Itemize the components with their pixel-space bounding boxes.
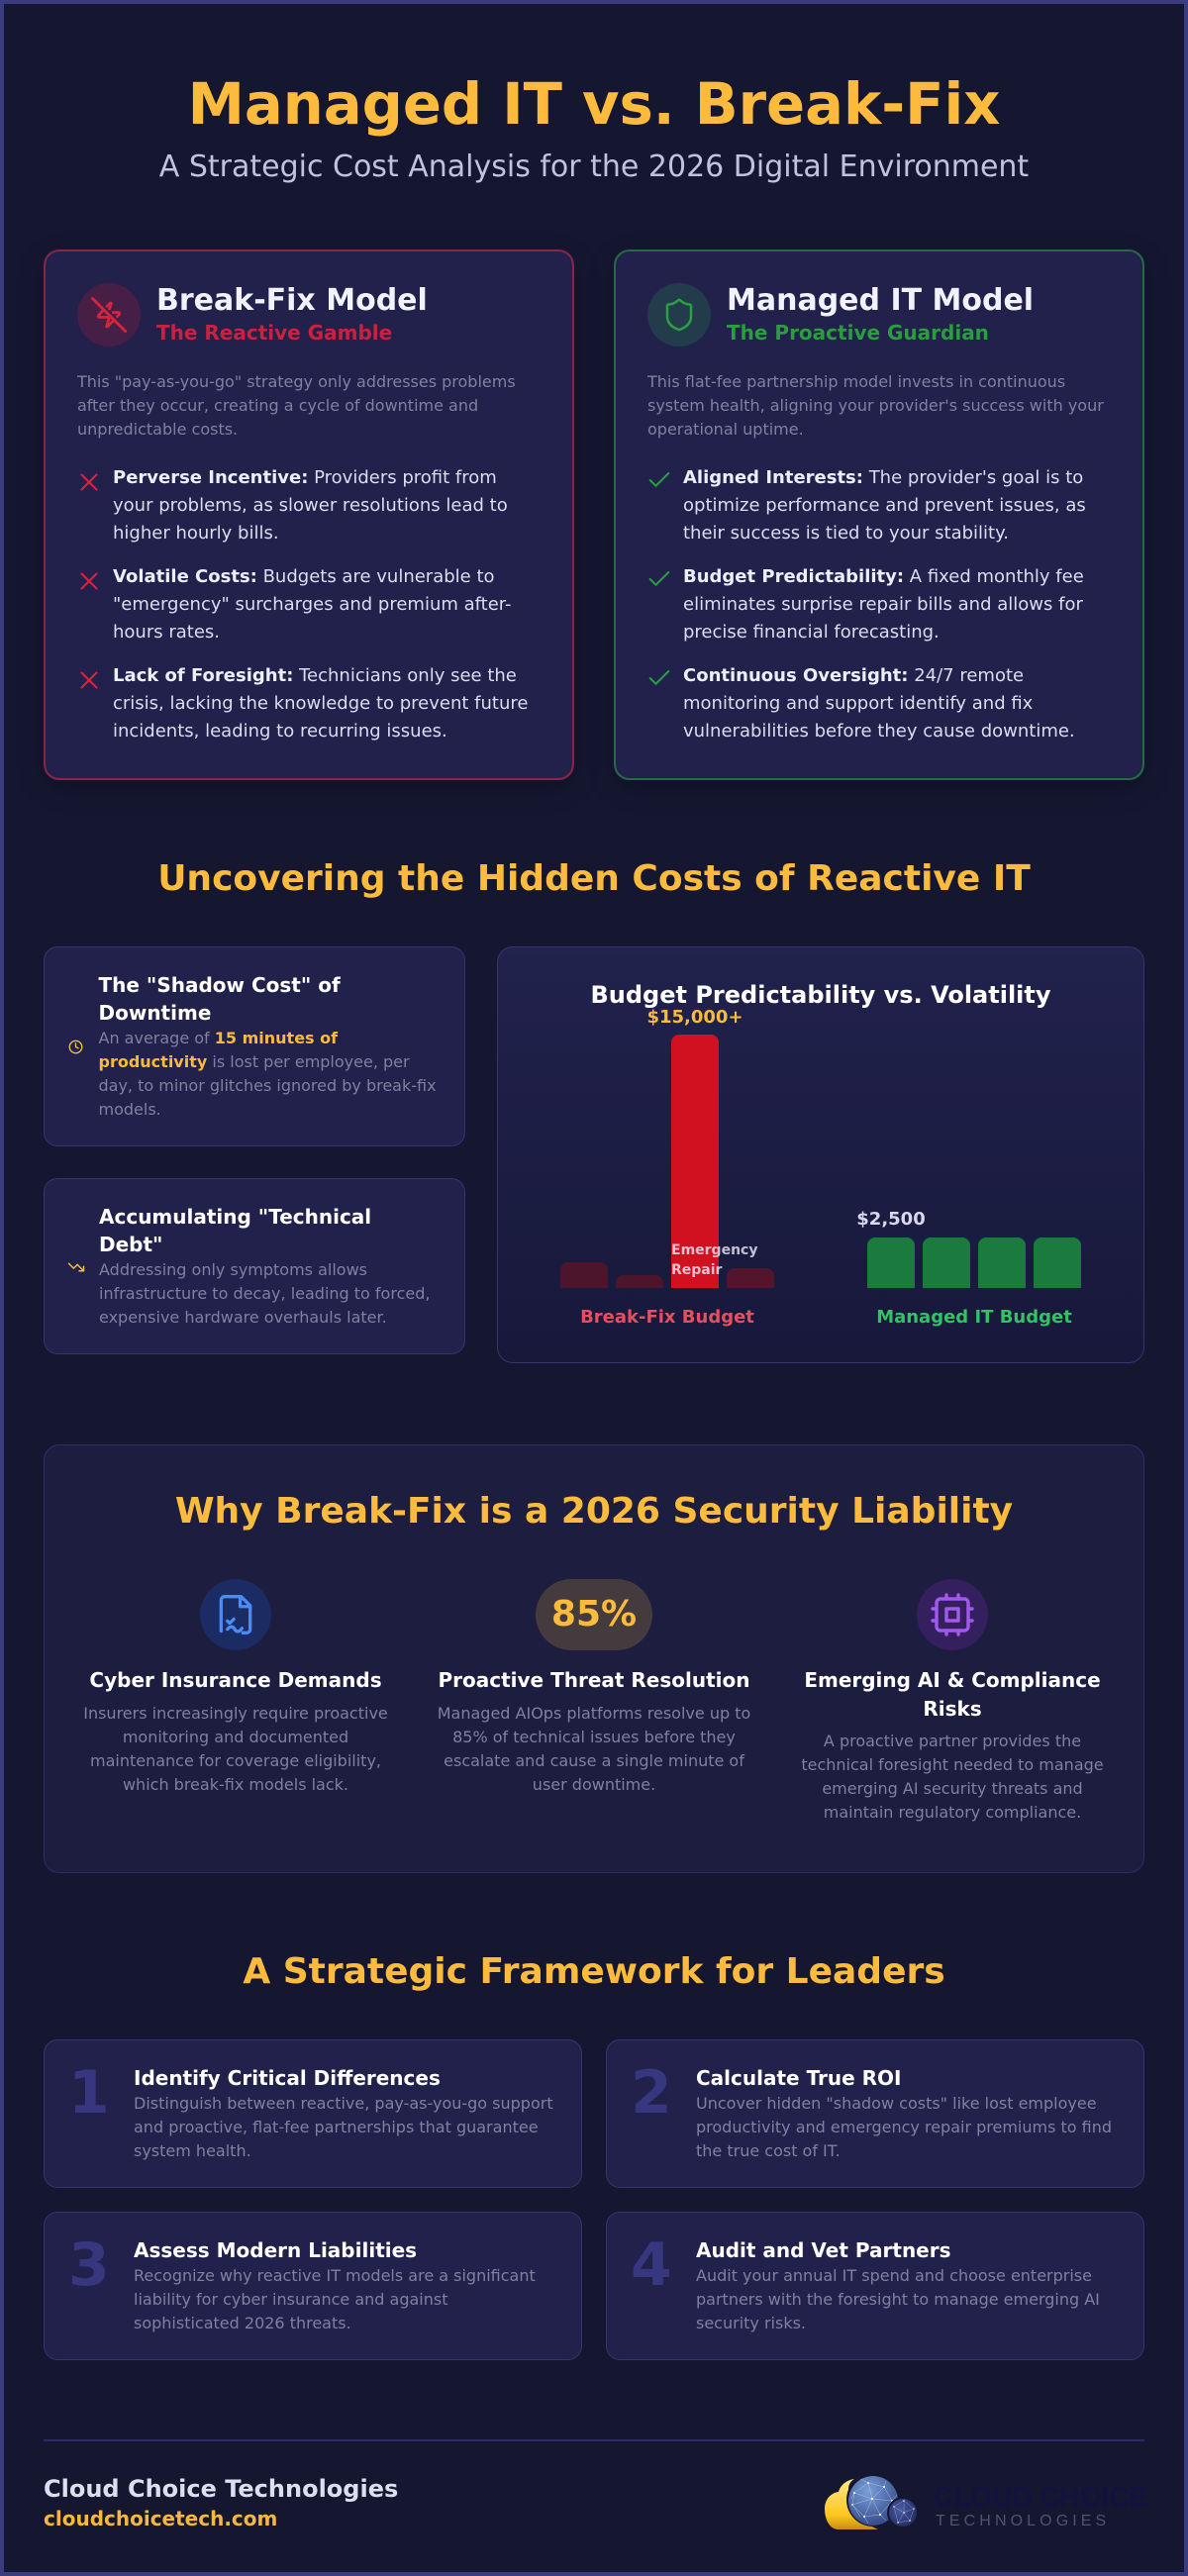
heading: cyber insurance: Cyber Insurance Demands <box>89 1668 382 1692</box>
icon: insurance document <box>200 1579 271 1650</box>
title: Managed IT vs. Break-Fix <box>188 71 1000 138</box>
text: emerging ai: maintain regulatory compliance. <box>824 1803 1081 1822</box>
heading: shadow cost: The "Shadow Cost" of <box>99 973 341 997</box>
heading: step 2: Calculate True ROI <box>696 2066 901 2090</box>
text: step 4: security risks. <box>696 2314 806 2332</box>
text: shadow cost: An average of 15 minutes of <box>99 1029 338 1047</box>
text: step 1: system health. <box>134 2141 251 2160</box>
bullet: perverse incentive: higher hourly bills. <box>113 523 279 544</box>
icon: check 1 <box>649 472 669 487</box>
text: managed it description <box>647 372 1104 439</box>
footer company name: Cloud Choice Technologies <box>44 2475 398 2503</box>
bullet: continuous oversight: monitoring and support identify and fix <box>683 693 1033 714</box>
subtitle: A Strategic Cost Analysis for the 2026 Digital Environment <box>159 149 1029 184</box>
bar chart: managed it budget <box>867 1238 1081 1288</box>
text: threat resolution: escalate and cause a single minute of <box>444 1751 744 1770</box>
heading: technical debt: Accumulating "Technical <box>99 1205 371 1229</box>
bullet: budget predictability: Budget Predictability: A fixed monthly fee <box>683 566 1084 587</box>
text: cyber insurance: maintenance for coverage eligibility, <box>90 1751 381 1770</box>
icon: clock <box>69 1040 83 1053</box>
text: break-fix description: unpredictable costs. <box>77 420 238 439</box>
bullet: lack of foresight: Lack of Foresight: Technicians only see the <box>113 665 517 686</box>
text: managed it description: This flat-fee partnership model invests in continuous <box>647 372 1065 391</box>
axis label: break-fix budget: Break-Fix Budget <box>580 1307 754 1328</box>
bullet: lack of foresight: incidents, leading to recurring issues. <box>113 721 447 742</box>
text: break-fix description: This "pay-as-you-go" strategy only addresses problems <box>77 372 516 391</box>
bullet: volatile costs: "emergency" surcharges and premium after- <box>113 594 512 615</box>
bullet: aligned interests: Aligned Interests: The provider's goal is to <box>683 467 1083 488</box>
heading: emerging ai: Risks <box>923 1697 982 1721</box>
text: step 3: liability for cyber insurance and against <box>134 2290 447 2309</box>
tagline: the reactive gamble: The Reactive Gamble <box>156 321 392 345</box>
chart title: Budget Predictability vs. Volatility <box>590 981 1051 1009</box>
axis label: managed it budget: Managed IT Budget <box>876 1307 1072 1328</box>
text: step 4: Audit your annual IT spend and choose enterprise <box>696 2266 1092 2285</box>
annotation: emergency repair: Emergency <box>671 1242 757 1258</box>
heading: security liability: Why Break-Fix is a 2026 Security Liability <box>175 1491 1013 1532</box>
bullet: aligned interests: their success is tied to your stability. <box>683 523 1009 544</box>
text: step 2 <box>696 2094 1112 2160</box>
icon: trending down <box>67 1263 85 1271</box>
bullet: continuous oversight <box>683 665 1075 742</box>
bullet: perverse incentive: Perverse Incentive: Providers profit from <box>113 467 497 488</box>
text: break-fix description: after they occur, creating a cycle of downtime and <box>77 396 478 415</box>
text: cyber insurance: monitoring and documented <box>123 1728 348 1746</box>
number 1: 1 <box>68 2058 110 2128</box>
icon: cross 3 <box>80 671 97 689</box>
text: step 1: Distinguish between reactive, pay-as-you-go support <box>134 2094 553 2113</box>
text: threat resolution <box>438 1704 750 1794</box>
icon: cross 2 <box>80 572 97 590</box>
bullet: budget predictability: eliminates surprise repair bills and allows for <box>683 594 1083 615</box>
tagline: the proactive guardian: The Proactive Guardian <box>727 321 989 345</box>
text: step 2: the true cost of IT. <box>696 2141 841 2160</box>
heading: step 3: Assess Modern Liabilities <box>134 2238 417 2262</box>
value label: 2500: $2,500 <box>856 1209 926 1230</box>
text: technical debt <box>99 1260 430 1327</box>
annotation: emergency repair: Repair <box>671 1262 722 1278</box>
panel: shadow cost <box>44 946 465 1146</box>
panel: managed it model <box>614 249 1144 780</box>
heading: threat resolution: Proactive Threat Resolution <box>438 1668 750 1692</box>
text: step 3: sophisticated 2026 threats. <box>134 2314 351 2332</box>
text: threat resolution: user downtime. <box>533 1775 655 1794</box>
footer website: cloudchoicetech.com <box>44 2507 277 2530</box>
text: step 3 <box>134 2266 536 2332</box>
heading: break-fix model: Break-Fix Model <box>156 283 428 318</box>
text: step 4: partners with the foresight to manage emerging AI <box>696 2290 1100 2309</box>
text: threat resolution: 85% of technical issues before they <box>452 1728 736 1746</box>
text: cyber insurance <box>83 1704 388 1794</box>
bullet: aligned interests: optimize performance and prevent issues, as <box>683 495 1086 516</box>
heading: managed it model: Managed IT Model <box>727 283 1034 318</box>
bullet: budget predictability: precise financial forecasting. <box>683 622 940 643</box>
text: step 1: and proactive, flat-fee partnerships that guarantee <box>134 2118 539 2136</box>
text: shadow cost: productivity is lost per employee, per <box>99 1052 410 1071</box>
value label: 15000: $15,000+ <box>646 1007 743 1028</box>
logo tagline: TECHNOLOGIES <box>936 2513 1110 2529</box>
logo: cloud choice <box>825 2476 1147 2529</box>
text: technical debt: infrastructure to decay, leading to forced, <box>99 1284 430 1303</box>
heading: emerging ai <box>804 1668 1101 1721</box>
panel: budget chart <box>497 946 1144 1363</box>
stat badge: 85 percent: 85% <box>551 1594 637 1635</box>
heading: technical debt <box>99 1205 371 1256</box>
text: managed it description: system health, aligning your provider's success with your <box>647 396 1104 415</box>
text: step 3: Recognize why reactive IT models are a significant <box>134 2266 536 2285</box>
text: technical debt: Addressing only symptoms allows <box>99 1260 367 1279</box>
text: threat resolution: Managed AIOps platforms resolve up to <box>438 1704 750 1723</box>
icon: cpu <box>917 1579 988 1650</box>
text: emerging ai: emerging AI security threats and <box>822 1779 1083 1798</box>
bullet: volatile costs <box>113 566 512 643</box>
icon: zap off <box>77 283 141 347</box>
text: technical debt: expensive hardware overhauls later. <box>99 1308 387 1327</box>
stat badge: 85 percent <box>536 1579 652 1650</box>
text: cyber insurance: Insurers increasingly require proactive <box>83 1704 388 1723</box>
heading: step 4: Audit and Vet Partners <box>696 2238 951 2262</box>
text: cyber insurance: which break-fix models lack. <box>123 1775 348 1794</box>
heading: shadow cost <box>99 973 341 1025</box>
text: shadow cost <box>99 1029 437 1119</box>
text: step 1 <box>134 2094 553 2160</box>
icon: check 3 <box>649 670 669 685</box>
heading: shadow cost: Downtime <box>99 1001 211 1025</box>
icon: shield <box>647 283 711 347</box>
heading: strategic framework: A Strategic Framework for Leaders <box>243 1951 945 1992</box>
heading: hidden costs: Uncovering the Hidden Costs of Reactive IT <box>157 858 1031 899</box>
bullet: volatile costs: Volatile Costs: Budgets are vulnerable to <box>113 566 495 587</box>
bullet: perverse incentive: your problems, as slower resolutions lead to <box>113 495 508 516</box>
panel: step 3 <box>44 2212 582 2360</box>
panel: step 2 <box>606 2039 1144 2188</box>
bullet: aligned interests <box>683 467 1086 544</box>
number 3: 3 <box>68 2230 110 2300</box>
text: step 4 <box>696 2266 1100 2332</box>
icon: check 2 <box>649 571 669 586</box>
text: emerging ai: A proactive partner provides the <box>824 1732 1081 1750</box>
text: step 2: productivity and emergency repair premiums to find <box>696 2118 1112 2136</box>
number 2: 2 <box>631 2058 672 2128</box>
logo wordmark: CLOUD CHOICE <box>934 2481 1147 2512</box>
bullet: perverse incentive <box>113 467 508 544</box>
text: managed it description: operational uptime. <box>647 420 804 439</box>
text: shadow cost: day, to minor glitches ignored by break-fix <box>99 1076 437 1095</box>
panel: security liability <box>44 1444 1144 1873</box>
bullet: lack of foresight: crisis, lacking the knowledge to prevent future <box>113 693 528 714</box>
panel: step 1 <box>44 2039 582 2188</box>
heading: emerging ai: Emerging AI & Compliance <box>804 1668 1101 1692</box>
text: shadow cost: models. <box>99 1100 161 1119</box>
panel: technical debt <box>44 1178 465 1354</box>
bullet: lack of foresight <box>113 665 528 742</box>
bullet: budget predictability <box>683 566 1084 643</box>
text: break-fix description <box>77 372 516 439</box>
text: step 2: Uncover hidden "shadow costs" like lost employee <box>696 2094 1097 2113</box>
panel: break-fix model <box>44 249 574 780</box>
heading: step 1: Identify Critical Differences <box>134 2066 441 2090</box>
bar chart: break-fix budget <box>560 1035 774 1288</box>
text: emerging ai <box>801 1732 1104 1822</box>
icon: cross 1 <box>80 473 97 491</box>
heading: technical debt: Debt" <box>99 1233 162 1256</box>
number 4: 4 <box>631 2230 672 2300</box>
bullet: continuous oversight: vulnerabilities before they cause downtime. <box>683 721 1075 742</box>
bullet: continuous oversight: Continuous Oversight: 24/7 remote <box>683 665 1024 686</box>
bullet: volatile costs: hours rates. <box>113 622 220 643</box>
text: emerging ai: technical foresight needed to manage <box>801 1755 1104 1774</box>
panel: step 4 <box>606 2212 1144 2360</box>
annotation: emergency repair <box>671 1242 758 1278</box>
